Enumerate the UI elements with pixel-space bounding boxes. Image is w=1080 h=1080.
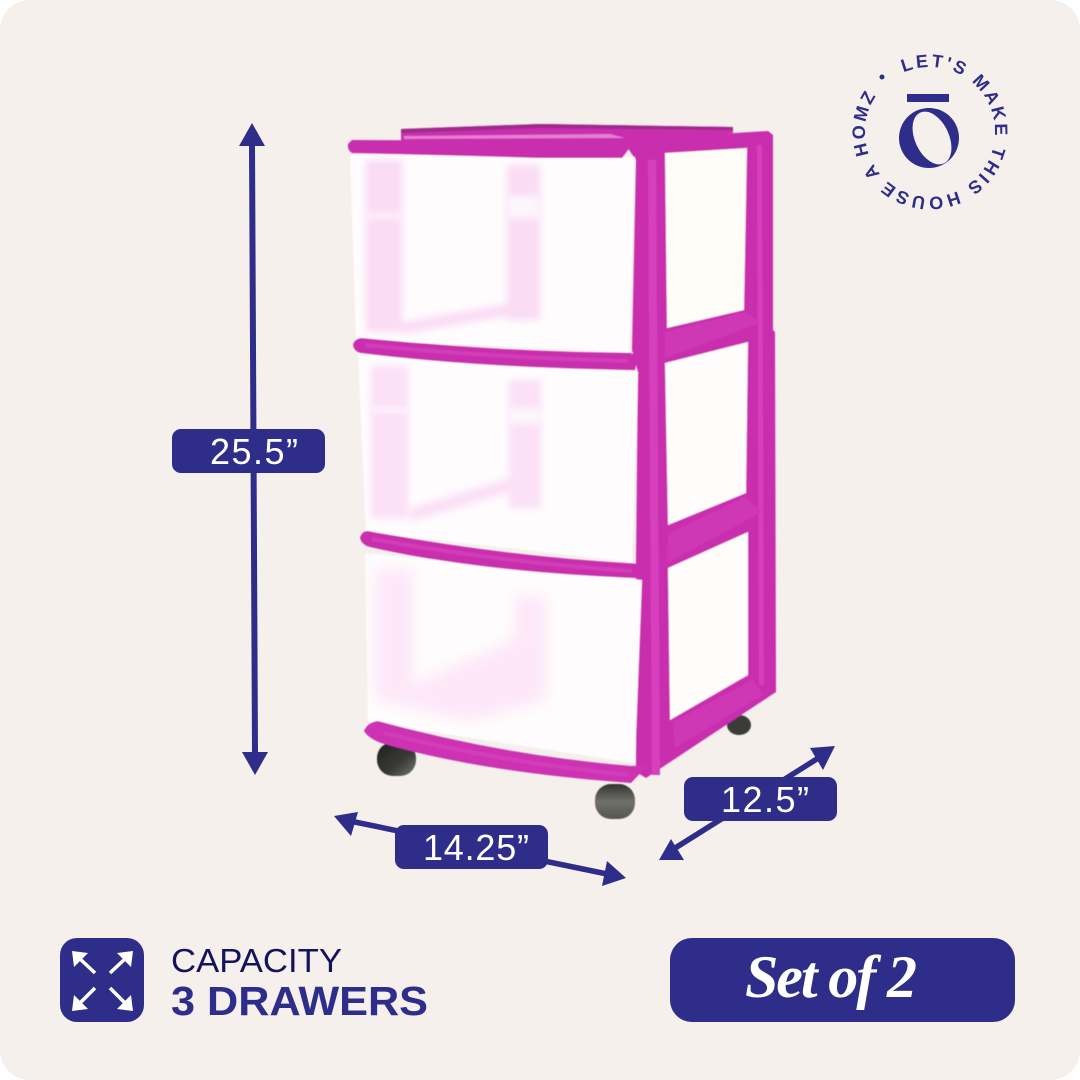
logo dot — [880, 74, 884, 80]
wheels — [377, 715, 751, 819]
logo circular text: LET'S MAKE THIS HOUSE A HOMZ — [852, 54, 1008, 210]
capacity value: 3 DRAWERS — [171, 978, 428, 1024]
arrow: height — [239, 123, 268, 775]
side rails — [665, 312, 763, 748]
side panels — [665, 148, 748, 720]
label: width 14.25: 14.25” — [423, 827, 529, 868]
top lid — [401, 124, 733, 142]
capacity label: CAPACITY — [171, 942, 342, 979]
side frame highlights — [648, 145, 764, 775]
label: depth 12.5: 12.5” — [721, 779, 809, 820]
rail highlights — [365, 345, 632, 775]
arrow: depth — [659, 746, 835, 860]
drawer rail: middle — [353, 338, 638, 370]
logo macron — [907, 94, 949, 102]
label: width 14.25 — [395, 825, 548, 869]
drawer rail: bottom — [364, 721, 648, 783]
drawer rail: top — [348, 140, 628, 158]
icon: capacity arrows — [60, 938, 144, 1022]
label: height 25.5: 25.5” — [210, 431, 298, 472]
side frame — [622, 131, 776, 778]
label: height 25.5 — [172, 429, 325, 473]
logo letter o — [899, 105, 959, 171]
logo badge — [852, 54, 1008, 210]
badge: set of 2: Set of 2 — [745, 944, 917, 1010]
drawer rail: lower — [360, 531, 642, 578]
badge: set of 2 — [670, 938, 1015, 1022]
product: three drawer cart — [348, 124, 776, 819]
arrow: width — [334, 812, 626, 886]
label: depth 12.5 — [684, 777, 837, 821]
drawer: middle — [358, 352, 638, 562]
drawer: top — [350, 155, 635, 352]
drawer: bottom — [365, 553, 642, 763]
